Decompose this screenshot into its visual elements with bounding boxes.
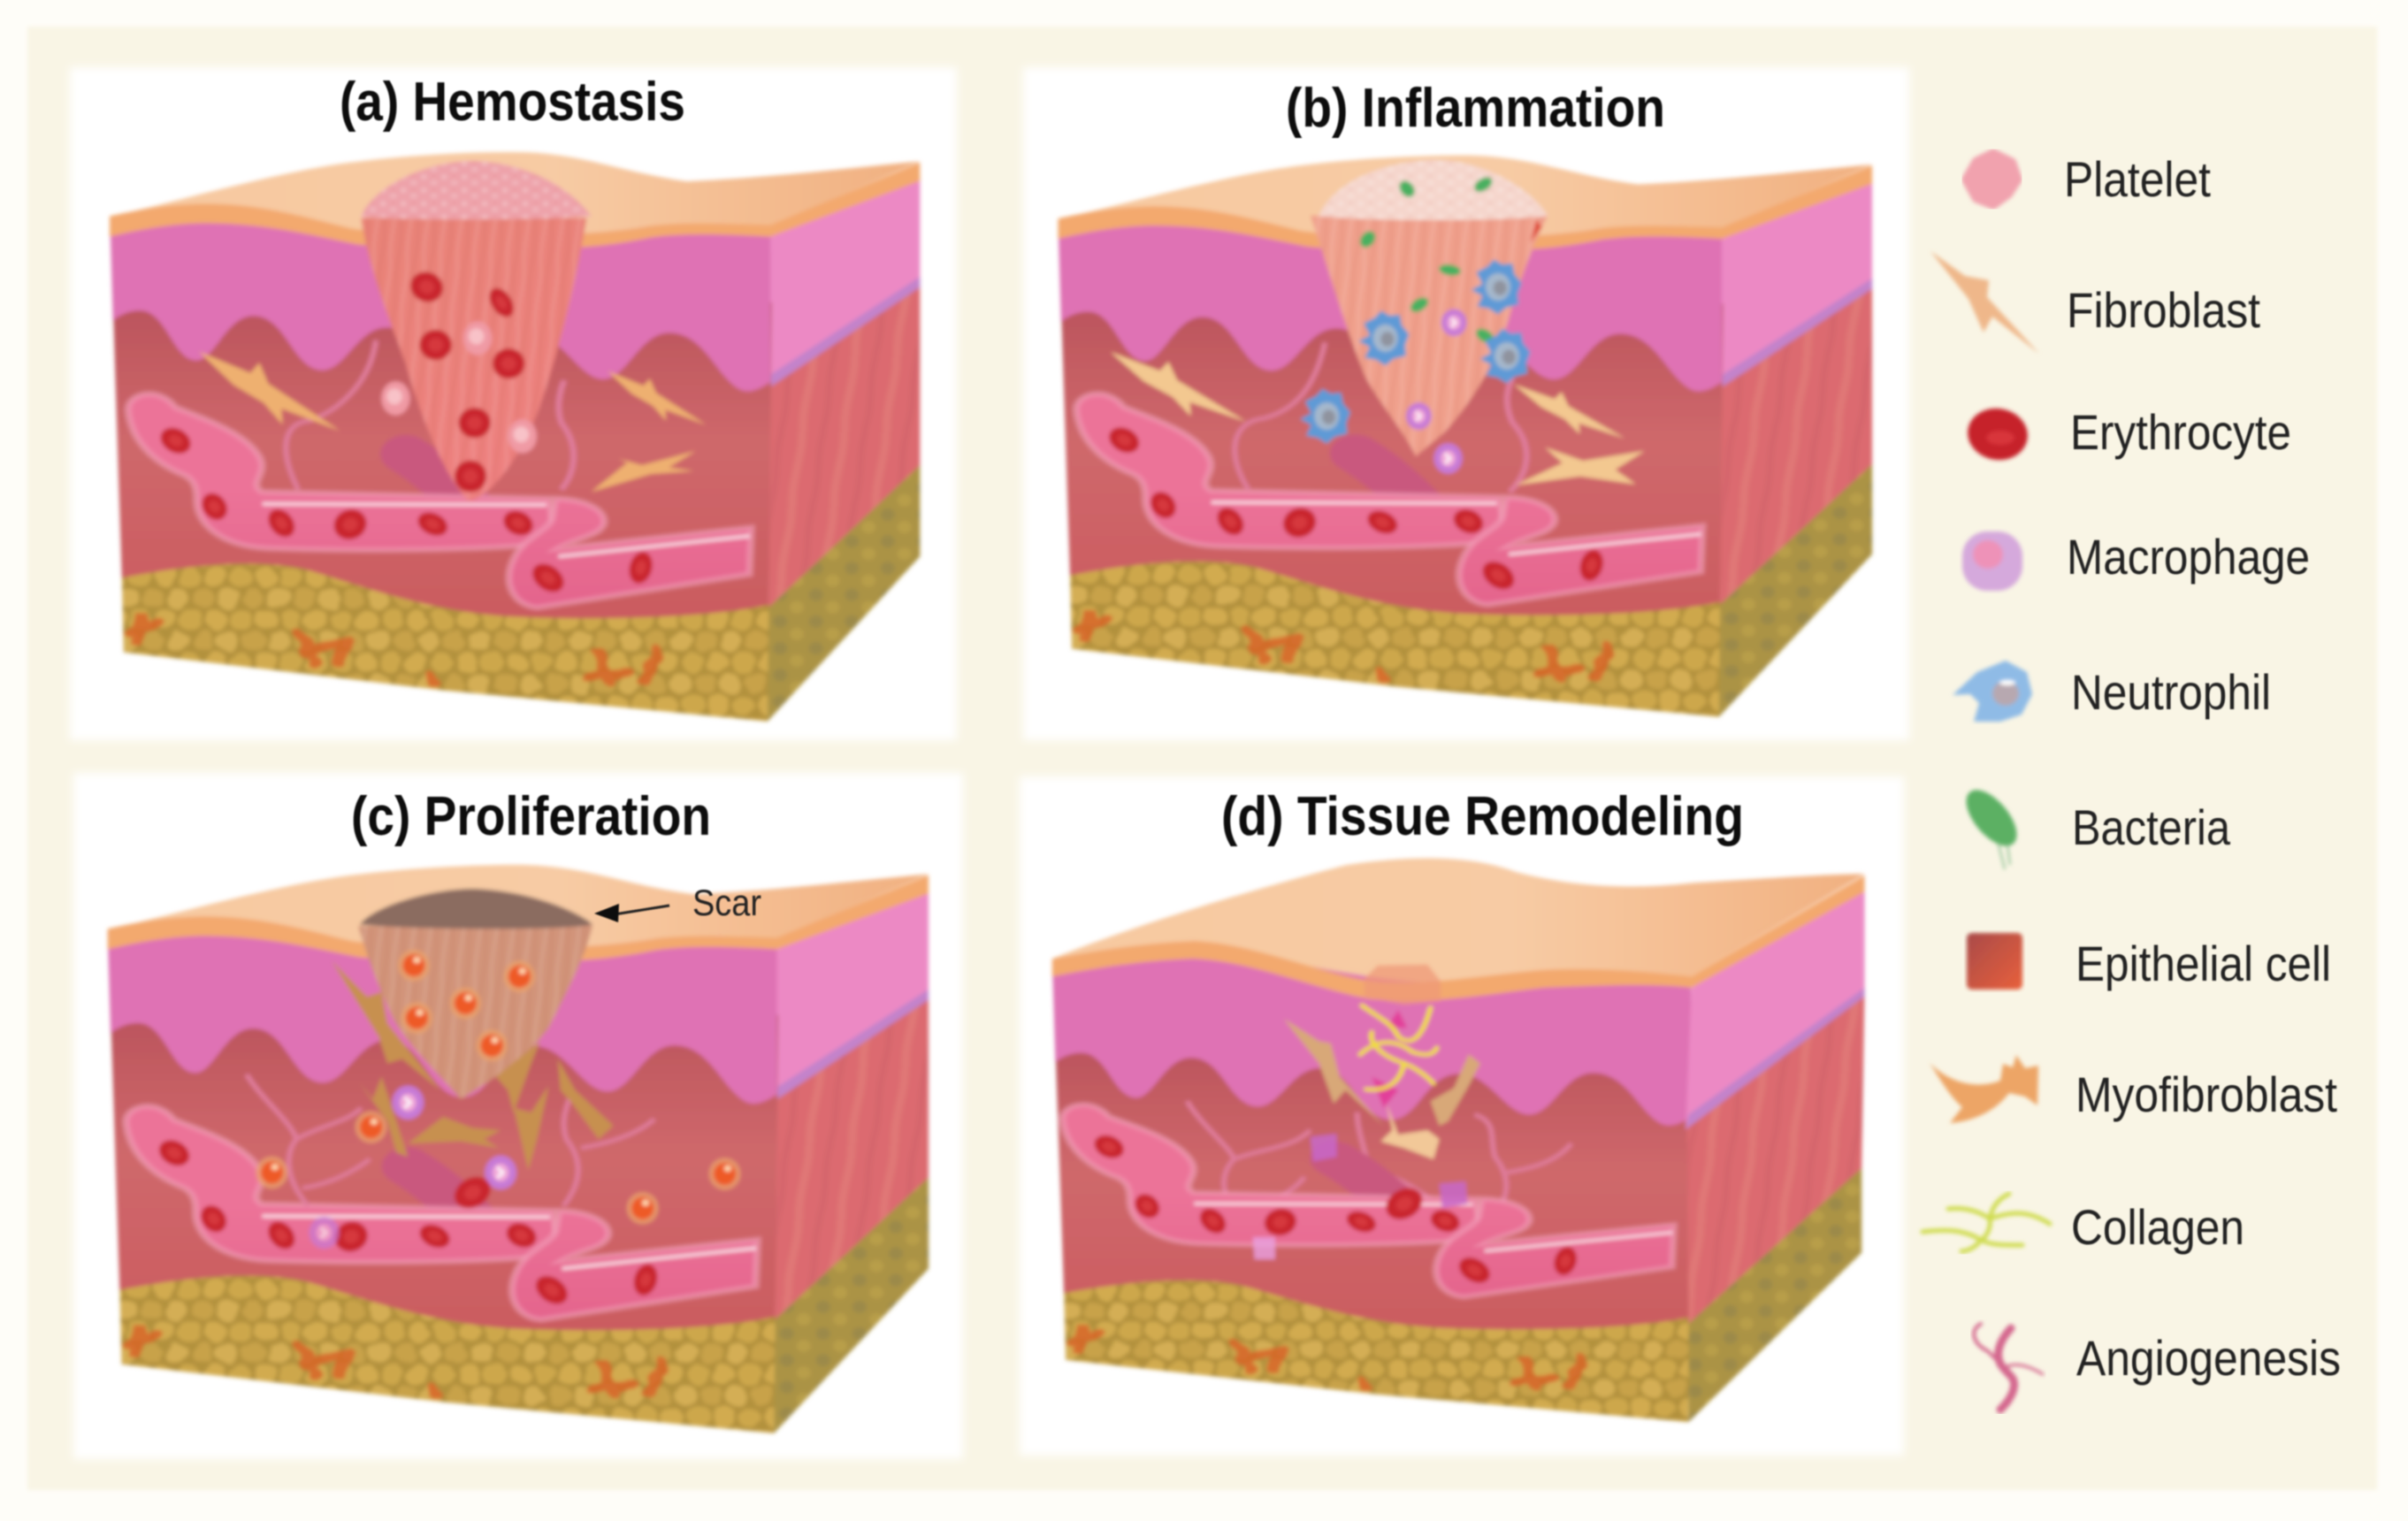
skin block a [89,152,920,739]
legend item: Myofibroblast [1930,1055,2337,1123]
skin block c [87,865,929,1451]
panel: (c) Proliferation [73,773,963,1459]
legend item: Neutrophil: Neutrophil [2071,664,2271,720]
legend item: Bacteria: Bacteria [2072,799,2231,855]
panel: (b) Inflammation [1023,67,1909,740]
legend item: Erythrocyte [1963,404,2291,464]
title: (b) Inflammation: (b) Inflammation [1286,78,1665,139]
title: (c) Proliferation: (c) Proliferation [351,786,711,847]
scar cap [360,889,592,929]
legend item: Angiogenesis [1974,1324,2341,1410]
legend item: Neutrophil [1953,661,2271,722]
title: (a) Hemostasis: (a) Hemostasis [340,72,685,133]
legend item: Fibroblast: Fibroblast [2067,282,2260,338]
skin block b [1037,156,1872,735]
legend item: Platelet [1965,151,2211,207]
legend item: Erythrocyte: Erythrocyte [2070,404,2291,460]
legend item: Macrophage [1962,529,2310,591]
legend item: Epithelial cell [1967,933,2331,991]
legend item: Collagen [1923,1194,2244,1255]
legend item: Collagen: Collagen [2071,1199,2244,1255]
panel: (d) Tissue Remodeling [1020,776,1904,1456]
panel: (a) Hemostasis [70,67,957,740]
skin block d [1032,858,1864,1438]
legend item: Fibroblast [1930,251,2260,354]
legend item: Platelet: Platelet [2064,151,2211,207]
scar arrow [594,904,669,922]
legend item: Bacteria [1957,782,2231,869]
legend [1923,151,2341,1410]
legend item: Macrophage: Macrophage [2067,529,2310,585]
legend item: Myofibroblast: Myofibroblast [2075,1066,2337,1122]
label: Scar: Scar [692,882,761,923]
legend item: Angiogenesis: Angiogenesis [2076,1330,2341,1386]
legend item: Epithelial cell: Epithelial cell [2075,936,2331,991]
title: (d) Tissue Remodeling: (d) Tissue Remodeling [1221,786,1744,847]
